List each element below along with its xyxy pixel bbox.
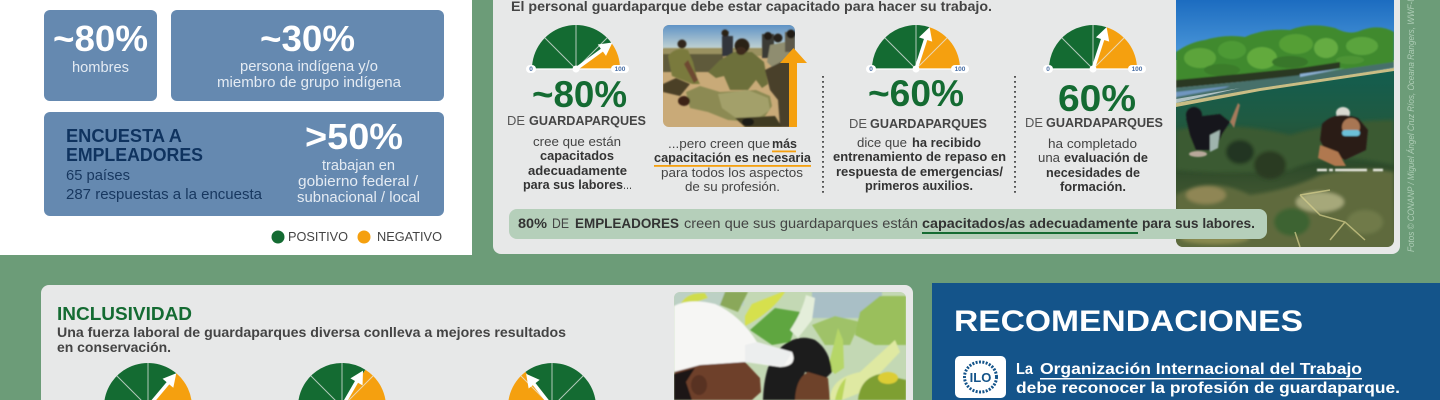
panel: recommendations — [932, 283, 1440, 400]
icon: ILO logo: ILO — [970, 370, 991, 385]
stat: 60% refresher — [833, 73, 1006, 193]
stat card: 30% indigenous: ~30% — [260, 18, 355, 59]
stat: 60% needs assessment: 60% — [1058, 78, 1136, 119]
recommendation text: ILO — [1016, 361, 1400, 397]
stat: 60% needs assessment: GUARDAPARQUES — [1046, 115, 1163, 130]
callout: 80% of employers: para sus labores. — [1142, 216, 1255, 231]
text: more training needed: de su profesión. — [685, 179, 780, 194]
gauge: 80% trained: 100 — [615, 66, 626, 73]
recommendation text: ILO: debe reconocer la profesión de guardaparque. — [1016, 380, 1400, 397]
gauge: inclusivity 3 — [508, 363, 596, 400]
gauge: 60% refresher: 0 — [869, 66, 873, 73]
stat card: 30% indigenous — [171, 10, 444, 101]
panel: training — [493, 0, 1400, 254]
icon: orange upward arrow — [780, 48, 807, 127]
stat: 60% needs assessment: necesidades de — [1046, 165, 1140, 180]
gauge: 60% refresher: 100 — [955, 66, 966, 73]
stat: 60% needs assessment: DE — [1025, 115, 1043, 130]
callout: 80% of employers: EMPLEADORES — [575, 216, 679, 231]
stat card: 80% men: ~80% — [53, 18, 148, 59]
stat: 80% rangers — [507, 74, 646, 192]
inclusivity subheading: en conservación. — [57, 339, 171, 355]
card: employer survey: trabajan en — [322, 158, 395, 174]
stat card: 30% indigenous: miembro de grupo indígena — [217, 75, 402, 91]
gauge: 60% needs assessment: 0 — [1046, 66, 1050, 73]
legend: NEGATIVO — [377, 230, 442, 244]
gauge: 80% trained: 0 — [529, 66, 533, 73]
stat: 60% needs assessment — [1025, 78, 1163, 194]
recommendation text: ILO: La — [1016, 361, 1033, 378]
stat: 80% rangers: DE — [507, 113, 525, 128]
callout: 80% of employers — [509, 209, 1267, 239]
card: employer survey: 287 respuestas a la encuesta — [66, 187, 263, 203]
text: more training needed: más — [772, 136, 797, 151]
inclusivity subheading: Una fuerza laboral de guardaparques diversa conlleva a mejores resultados — [57, 324, 566, 340]
stat: 80% rangers: para sus labores — [523, 177, 623, 192]
stat: 60% refresher: ~60% — [868, 73, 964, 114]
text: more training needed — [654, 136, 812, 194]
gauge: 60% needs assessment — [1043, 25, 1146, 73]
icon: ILO logo — [955, 356, 1006, 398]
gauge: 60% needs assessment: 100 — [1132, 66, 1143, 73]
stat: 60% refresher: ha recibido — [912, 135, 981, 150]
legend: POSITIVO — [288, 230, 348, 244]
card: employer survey — [44, 112, 444, 216]
inclusivity heading: INCLUSIVIDAD — [57, 304, 192, 324]
text: more training needed: capacitación es necesaria — [654, 150, 812, 165]
gauge: 60% refresher — [866, 25, 969, 73]
card: employer survey: gobierno federal / — [298, 174, 419, 190]
stat card: 80% men — [44, 10, 157, 101]
stat: 80% rangers: ... — [623, 177, 632, 192]
stat card: 30% indigenous: persona indígena y/o — [240, 59, 378, 75]
gauge: 80% trained — [526, 25, 629, 75]
stat: 80% rangers: ~80% — [532, 74, 627, 115]
stat: 60% needs assessment: una — [1038, 150, 1061, 165]
text: more training needed: para todos los aspectos — [661, 165, 804, 180]
stat: 80% rangers: capacitados — [540, 148, 614, 163]
photo: divers in mangrove — [1176, 0, 1394, 247]
stat: 80% rangers: cree que están — [533, 134, 621, 149]
panel: inclusivity — [41, 285, 913, 400]
card: employer survey: EMPLEADORES — [66, 144, 203, 165]
stat: 60% refresher: primeros auxilios. — [865, 178, 973, 193]
photo: rangers first aid training — [663, 25, 796, 127]
stat: 60% refresher: DE — [849, 116, 867, 131]
stat: 60% refresher: entrenamiento de repaso en — [833, 149, 1006, 164]
stat: 60% refresher: respuesta de emergencias/ — [836, 164, 1003, 179]
gauge: inclusivity 2 — [298, 363, 386, 400]
photo: women rangers with plants — [674, 292, 906, 400]
card: employer survey: >50% — [305, 116, 403, 157]
stat: 60% needs assessment: ha completado — [1048, 136, 1137, 151]
card: employer survey: ENCUESTA A — [66, 125, 182, 146]
stat: 60% refresher: dice que — [857, 135, 907, 150]
stat: 60% needs assessment: evaluación de — [1064, 150, 1148, 165]
card: employer survey: subnacional / local — [297, 190, 420, 206]
legend — [272, 230, 442, 244]
stat: 60% refresher: GUARDAPARQUES — [870, 116, 987, 131]
recommendations heading: RECOMENDACIONES — [954, 305, 1303, 338]
recommendation text: ILO: Organización Internacional del Trabajo — [1040, 361, 1362, 378]
stat: 80% rangers: adecuadamente — [528, 163, 627, 178]
callout: 80% of employers: creen que sus guardaparques están — [684, 216, 918, 231]
callout: 80% of employers: 80% — [518, 216, 547, 231]
stat: 80% rangers: GUARDAPARQUES — [529, 113, 646, 128]
callout: 80% of employers: capacitados/as adecuadamente — [922, 216, 1139, 231]
gauge: inclusivity 1 — [104, 363, 192, 400]
card: employer survey: 65 países — [66, 168, 130, 184]
stat: 60% needs assessment: formación. — [1060, 179, 1126, 194]
text: more training needed: ...pero creen que — [668, 136, 770, 151]
callout: 80% of employers: DE — [552, 216, 569, 231]
panel: survey demographics — [0, 0, 472, 255]
stat card: 80% men: hombres — [72, 60, 129, 76]
inclusivity subheading — [57, 324, 566, 355]
